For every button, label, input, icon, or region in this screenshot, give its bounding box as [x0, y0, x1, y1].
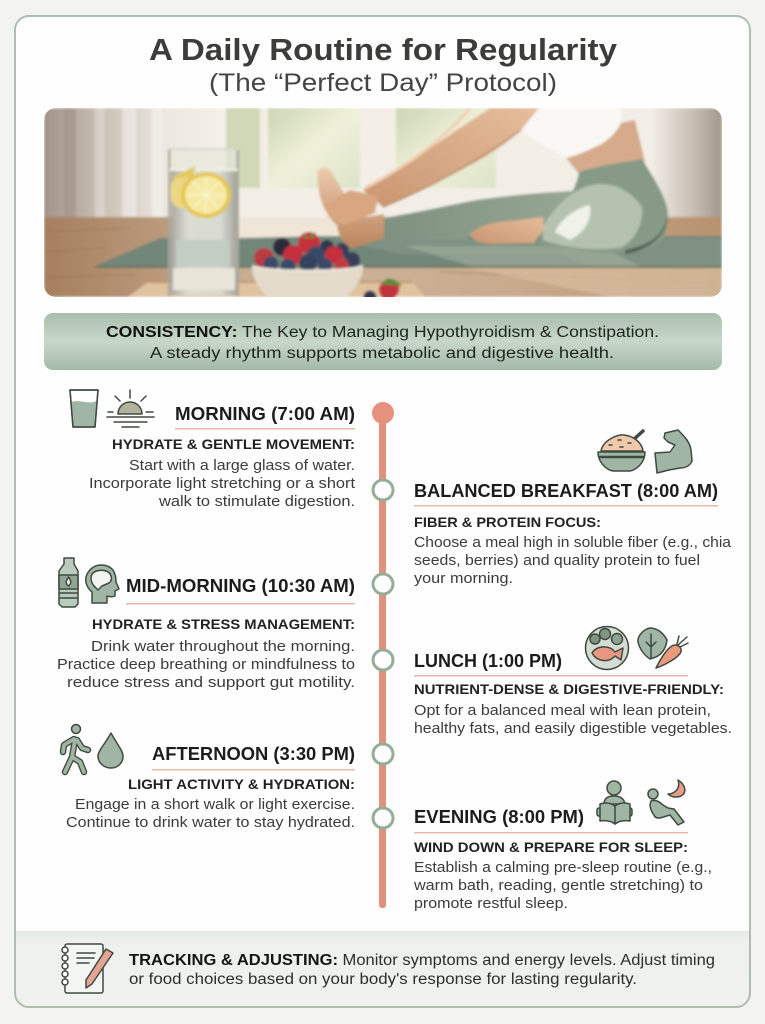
front foot and heel	[318, 167, 384, 248]
step: morning	[70, 390, 355, 510]
subtitle: (The “Perfect Day” Protocol)	[209, 69, 557, 97]
step: lunch	[414, 626, 732, 737]
step: evening: promote restful sleep.	[414, 896, 568, 912]
step: morning: walk to stimulate digestion.	[158, 494, 355, 510]
icon: carrot	[656, 636, 688, 668]
step: afternoon	[63, 724, 355, 831]
tray	[128, 282, 425, 297]
white top	[521, 108, 621, 158]
glass of water with lemon	[168, 147, 239, 297]
icon: glass of water	[70, 390, 98, 427]
evening text: WIND DOWN & PREPARE FOR SLEEP:	[414, 839, 688, 855]
icon: plate with fish	[586, 626, 628, 670]
banner	[44, 313, 722, 370]
step: evening: Establish a calming pre-sleep routine (e.g.,	[414, 860, 712, 876]
footer: tracking and adjusting: or food choices based on your body's response for lasting regularity.	[129, 971, 637, 988]
step: afternoon: Engage in a short walk or light exercise.	[75, 797, 355, 813]
step: mid-morning	[57, 558, 355, 691]
morning text: HYDRATE & GENTLE MOVEMENT:	[112, 436, 355, 452]
arm	[363, 108, 539, 207]
step: afternoon: Continue to drink water to stay hydrated.	[66, 815, 355, 831]
step: balanced breakfast: Choose a meal high in soluble fiber (e.g., chia	[414, 535, 732, 551]
extended leg	[383, 191, 584, 240]
afternoon text: LIGHT ACTIVITY & HYDRATION:	[128, 776, 355, 792]
morning heading: MORNING (7:00 AM)	[175, 404, 355, 424]
icon: oatmeal bowl	[598, 431, 645, 471]
step: mid-morning: Drink water throughout the morning.	[91, 639, 355, 655]
step: mid-morning: reduce stress and support gut motility.	[67, 675, 355, 691]
icon: head with brain	[86, 565, 119, 603]
step: balanced breakfast: your morning.	[414, 571, 513, 587]
upper arm shadow	[365, 108, 470, 188]
loose berries	[362, 289, 378, 297]
mid-morning text: HYDRATE & STRESS MANAGEMENT:	[92, 616, 355, 632]
evening heading: EVENING (8:00 PM)	[414, 807, 584, 827]
icon: resting person and moon	[648, 780, 685, 825]
icon: sunrise	[107, 390, 154, 427]
icon: notebook and pencil	[62, 944, 113, 993]
tucked foot	[472, 217, 544, 244]
berry bowl	[273, 238, 291, 256]
step: mid-morning: Practice deep breathing or mindfulness to	[57, 657, 355, 673]
step: morning: Incorporate light stretching or a short	[89, 476, 355, 492]
footer text: TRACKING & ADJUSTING: Monitor symptoms and energy levels. Adjust timing	[129, 952, 715, 969]
step: evening: warm bath, reading, gentle stretching) to	[413, 878, 703, 894]
mid-morning heading: MID-MORNING (10:30 AM)	[126, 576, 355, 596]
icon: spinach	[638, 628, 667, 659]
footer: tracking and adjusting	[15, 931, 750, 1007]
step: morning: Start with a large glass of water.	[129, 458, 355, 474]
step: evening	[413, 780, 712, 912]
afternoon heading: AFTERNOON (3:30 PM)	[152, 744, 355, 764]
lunch heading: LUNCH (1:00 PM)	[414, 651, 562, 671]
title	[149, 32, 618, 97]
banner text: CONSISTENCY: The Key to Managing Hypothyroidism & Constipation.	[106, 324, 659, 341]
yoga mat	[95, 236, 722, 267]
step: balanced breakfast: seeds, berries) and quality protein to fuel	[414, 553, 700, 569]
icon: person reading	[597, 781, 632, 824]
timeline	[372, 402, 394, 908]
photo: stretching with water and berries	[44, 108, 722, 304]
hand	[325, 190, 378, 225]
step: lunch: healthy fats, and easily digestible vegetables.	[414, 721, 732, 737]
icon: flexed arm	[655, 430, 692, 473]
breakfast heading: BALANCED BREAKFAST (8:00 AM)	[414, 481, 718, 501]
step: lunch: Opt for a balanced meal with lean protein,	[414, 703, 711, 719]
lunch text: NUTRIENT-DENSE & DIGESTIVE-FRIENDLY:	[414, 681, 724, 697]
banner: A steady rhythm supports metabolic and digestive health.	[150, 345, 614, 362]
icon: water drop	[98, 733, 123, 768]
bent thigh	[543, 184, 642, 249]
icon: walking person	[63, 724, 88, 772]
hips and waistband	[539, 159, 668, 252]
step: balanced breakfast	[414, 430, 732, 587]
icon: water bottle	[59, 558, 78, 607]
heading: A Daily Routine for Regularity	[149, 32, 618, 67]
breakfast text: FIBER & PROTEIN FOCUS:	[414, 514, 601, 530]
torso skin	[566, 120, 645, 174]
